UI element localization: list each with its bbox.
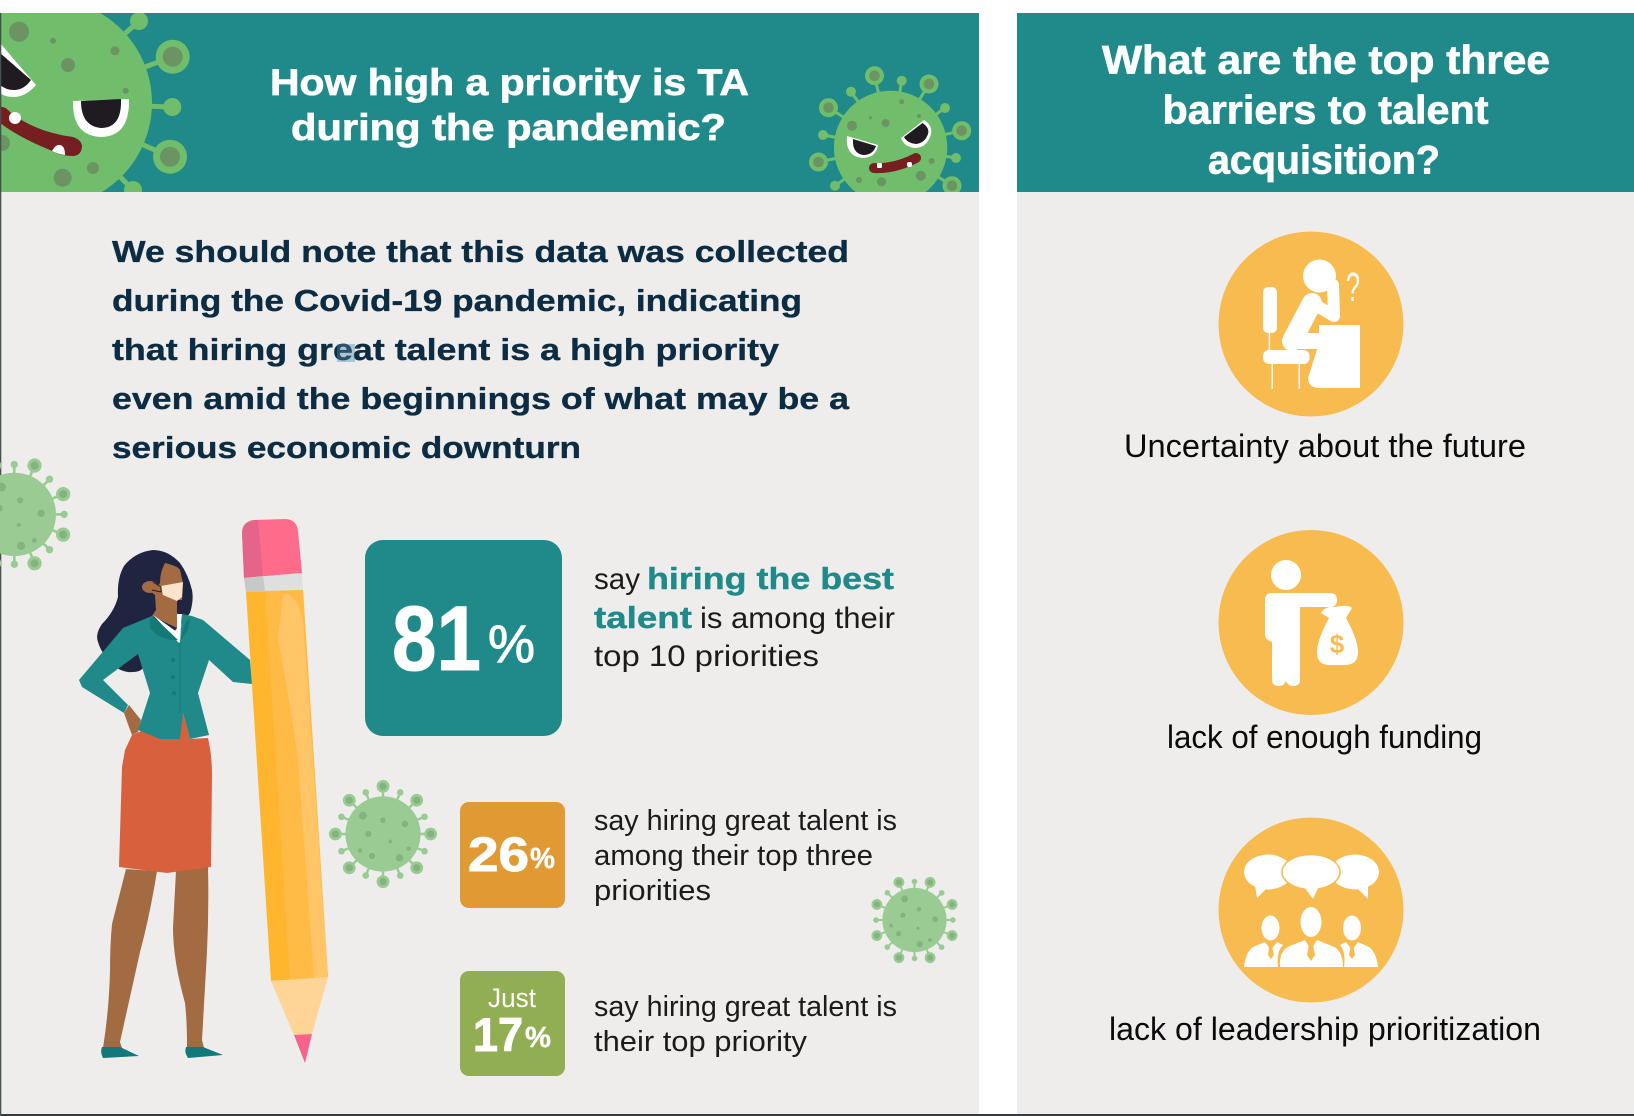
title: right panel: What are the top three (1102, 38, 1550, 82)
stat card: 81 percent (365, 540, 562, 736)
title: right panel (1102, 38, 1550, 182)
label: leadership: lack of leadership prioritization (1109, 1011, 1541, 1047)
panel: left background (0, 192, 979, 1114)
text block: pandemic note: serious economic downturn (112, 430, 581, 465)
illustration: giant pencil (242, 519, 328, 1063)
title: left panel (270, 62, 749, 148)
stat card: 26 percent: % (530, 843, 555, 875)
stat card: 81 percent: 81 (392, 588, 481, 690)
stat text: 26 percent (594, 805, 897, 907)
illustration: woman in mask (79, 550, 252, 1058)
icon: pale virus left edge (0, 436, 93, 593)
page edge line bottom (0, 1114, 1634, 1116)
stat text: 17 percent (594, 991, 897, 1058)
icon: person dropping money bag (1218, 530, 1404, 715)
icon: person dropping money bag: $ (1330, 629, 1345, 659)
page edge line left (0, 13, 1, 1116)
stat text: 81 percent: say (594, 563, 640, 596)
text block: pandemic note: even amid the beginnings of what may be a (112, 381, 850, 416)
stat card: 81 percent: % (488, 615, 535, 674)
stat text: 26 percent: among their top three (594, 840, 873, 872)
stat text: 17 percent: say hiring great talent is (594, 991, 897, 1023)
title: left panel: How high a priority is TA (270, 62, 749, 103)
title: right panel: barriers to talent (1162, 88, 1488, 132)
icon: pale virus centre (329, 780, 437, 888)
text block: pandemic note (112, 234, 850, 465)
stat text: 17 percent: their top priority (594, 1026, 808, 1058)
stat card: 17 percent: % (525, 1022, 551, 1054)
title: right panel: acquisition? (1208, 138, 1440, 182)
stat text: 26 percent: priorities (594, 875, 711, 907)
text block: pandemic note: that hiring great talent is a high priority (112, 332, 780, 367)
stat text: 81 percent: top 10 priorities (594, 640, 819, 673)
stat card: 26 percent (460, 802, 565, 908)
text block: pandemic note: We should note that this data was collected (112, 234, 849, 269)
right header band (1017, 13, 1634, 192)
stat card: 17 percent: 17 (473, 1008, 523, 1061)
icon: small angry virus in header (809, 66, 971, 204)
panel: right background (1017, 192, 1634, 1114)
label: funding: lack of enough funding (1167, 719, 1482, 755)
left header band (0, 13, 979, 192)
icon: large angry virus in header (1, 13, 190, 192)
icon: uncertain person at desk: ? (1346, 264, 1360, 310)
stat text: 81 percent: hiring the best (647, 561, 894, 596)
stat card: 26 percent: 26 (468, 829, 529, 882)
icon: uncertain person at desk (1218, 232, 1404, 416)
stat text: 26 percent: say hiring great talent is (594, 805, 897, 837)
stat text: 81 percent: is among their (700, 602, 895, 635)
stat card: 17 percent (460, 971, 565, 1076)
label: uncertainty: Uncertainty about the future (1124, 428, 1526, 464)
icon: leaders with speech bubbles (1218, 818, 1404, 1002)
icon: pale virus right (854, 860, 975, 980)
text block: pandemic note: during the Covid-19 pandemic, indicating (112, 283, 802, 318)
stat text: 81 percent: talent (594, 600, 692, 635)
stat text: 81 percent (594, 561, 895, 673)
stat card: 17 percent: Just (488, 983, 536, 1013)
title: left panel: during the pandemic? (291, 107, 726, 148)
